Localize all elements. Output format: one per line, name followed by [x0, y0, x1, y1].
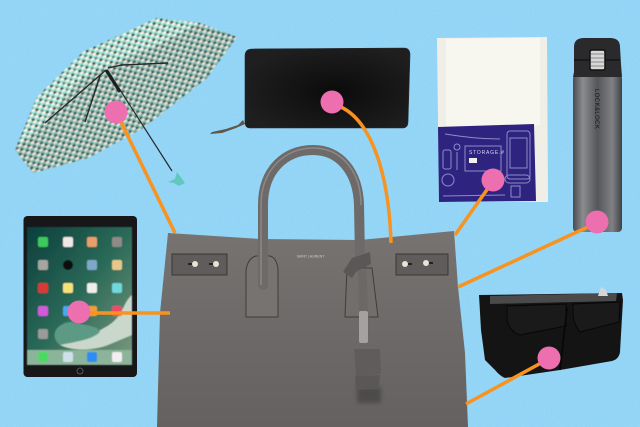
icon: bag organizer: [479, 287, 623, 378]
bag body: [157, 231, 468, 427]
label: bag brand: SAINT LAURENT: [297, 254, 325, 258]
right strap tab: [396, 254, 448, 275]
app icons: [38, 237, 122, 362]
icon: umbrella: [15, 18, 237, 186]
left strap tab: [172, 254, 227, 275]
bag charm: [343, 252, 371, 278]
marker dots: [68, 90, 608, 370]
icon: flask: [573, 38, 622, 232]
icon: storage folder: [437, 37, 548, 202]
connector lines: [85, 107, 590, 404]
label: flask brand: LOCK&LOCK: [593, 89, 599, 129]
label: storage: STORAGE.#: [469, 150, 505, 156]
icon: wallet: [210, 48, 410, 134]
handle base and patches: [246, 256, 278, 317]
bag handle: [263, 150, 360, 285]
icon: tablet: [24, 216, 137, 377]
icon: tote bag: [157, 148, 468, 427]
